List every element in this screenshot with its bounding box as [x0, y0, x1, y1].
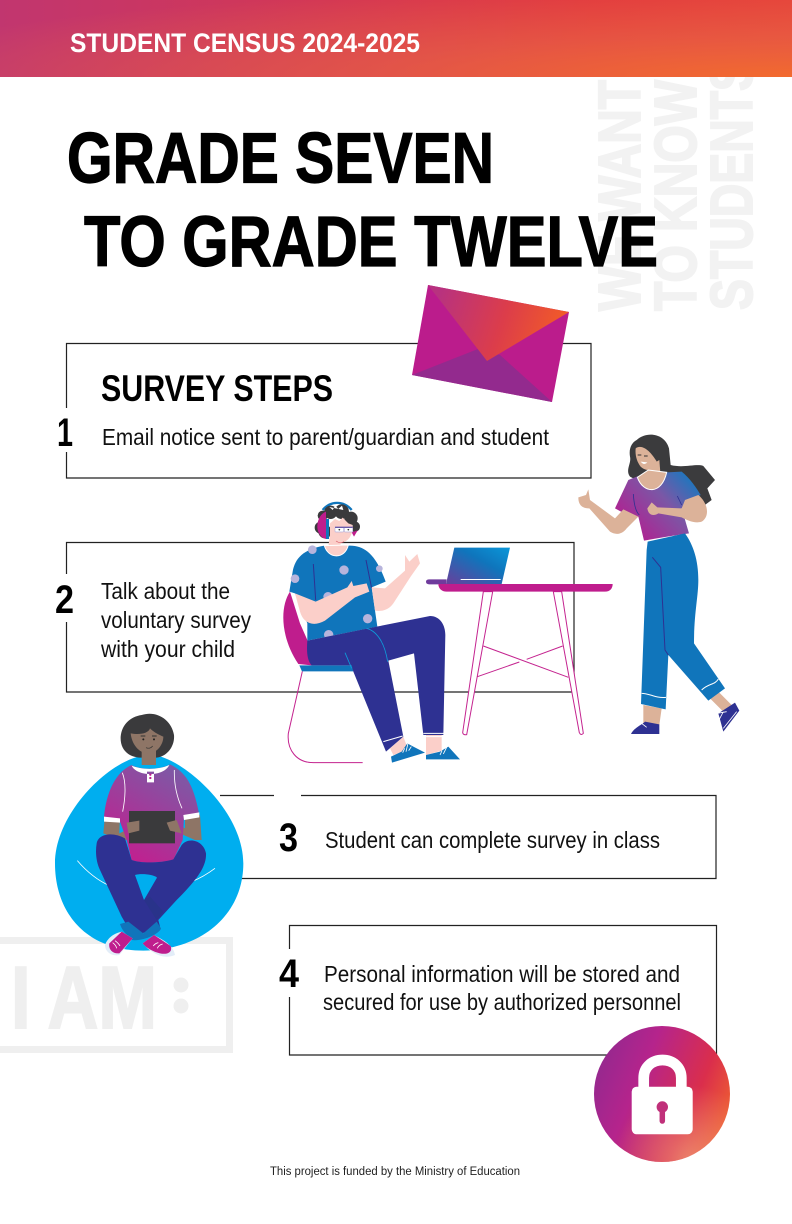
header banner: STUDENT CENSUS 2024-2025	[70, 28, 420, 58]
shoes	[391, 743, 460, 763]
icon: envelope	[412, 285, 569, 402]
panel: step 2: Talk about the	[101, 578, 230, 604]
hair	[121, 714, 174, 758]
trousers	[307, 616, 445, 755]
panel: step 4	[279, 926, 716, 1055]
beanbag	[55, 755, 243, 951]
panel: step 2: 2	[55, 578, 74, 622]
chair	[283, 592, 363, 763]
panel: step 2	[55, 542, 574, 692]
panel: step 4: secured for use by authorized personnel	[323, 989, 681, 1015]
watermark: we want to know students	[587, 60, 765, 311]
panel: step 1: 1	[57, 411, 73, 455]
face	[636, 447, 657, 470]
watermark: I AM box: I AM	[11, 948, 157, 1047]
arms	[103, 815, 202, 842]
hair	[628, 435, 715, 507]
header banner	[0, 0, 792, 77]
watermark: we want to know students: WE WANT	[587, 80, 653, 311]
panel: step 4: Personal information will be stored and	[324, 961, 680, 987]
shirt	[289, 545, 386, 641]
ankles	[643, 692, 732, 725]
laptop	[426, 548, 510, 584]
panel: step 3	[220, 796, 716, 878]
trousers	[641, 533, 725, 709]
neck	[648, 460, 661, 477]
illustration: man at desk	[283, 503, 613, 763]
icon: padlock badge	[594, 1026, 730, 1162]
arms	[295, 554, 420, 624]
title: TO GRADE TWELVE	[84, 203, 658, 282]
shoes	[631, 703, 739, 734]
watermark: we want to know students: STUDENTS	[699, 60, 765, 310]
arms	[578, 489, 707, 534]
illustration: standing woman	[578, 435, 739, 734]
desk	[438, 584, 613, 735]
crossed legs	[96, 834, 206, 937]
shirt	[104, 764, 199, 862]
shoes	[105, 932, 175, 957]
tablet	[129, 811, 175, 843]
panel: step 3: Student can complete survey in class	[325, 827, 660, 853]
panel: step 2: with your child	[100, 636, 235, 662]
shirt	[615, 472, 701, 541]
watermark: we want to know students: TO KNOW	[643, 80, 709, 311]
title	[67, 120, 658, 282]
panel: step 1: Email notice sent to parent/guardian and student	[102, 424, 550, 450]
panel: step 3: 3	[279, 816, 298, 860]
title: GRADE SEVEN	[67, 120, 494, 198]
panel: step 2: voluntary survey	[101, 607, 251, 633]
panel: step 4: 4	[279, 952, 300, 996]
illustration: student on beanbag	[55, 714, 243, 957]
face	[131, 728, 163, 753]
head and headphones	[315, 503, 360, 547]
panel: step 1	[57, 344, 591, 478]
neck	[142, 750, 156, 765]
footer note: This project is funded by the Ministry of Education	[270, 1166, 520, 1178]
panel: step 1: SURVEY STEPS	[101, 368, 333, 409]
